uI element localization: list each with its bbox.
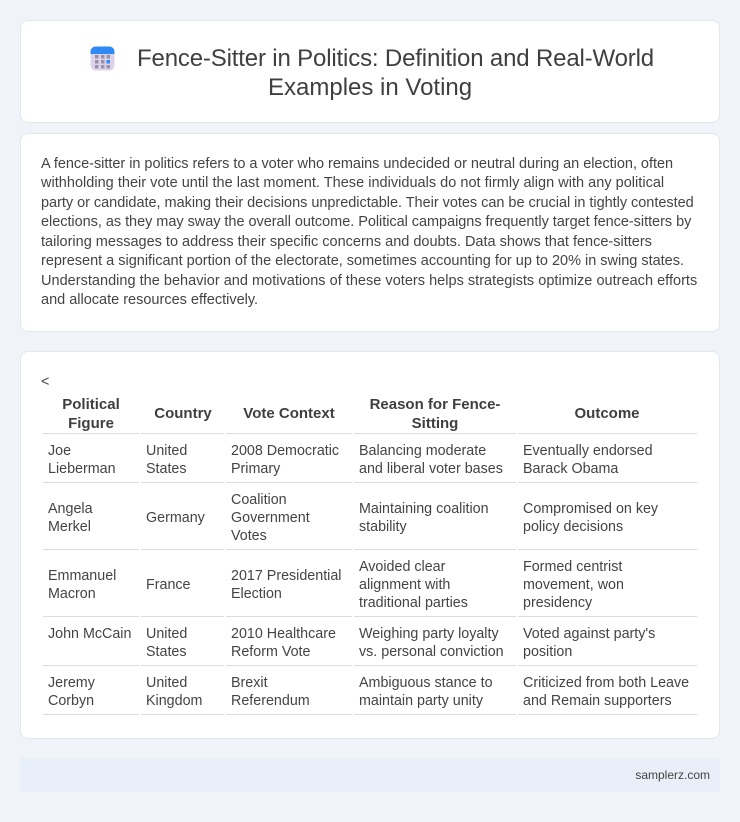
row: Joe Lieberman: Barack Obama	[523, 461, 618, 477]
row: Emmanuel Macron	[48, 559, 624, 611]
row: John McCain: Reform Vote	[231, 644, 310, 660]
table header row: Sitting	[412, 415, 458, 432]
row: Jeremy Corbyn: Kingdom	[146, 693, 202, 709]
text block: description: tailoring messages to address their specific concerns and doubts. Data shows that fence-sitters	[41, 234, 652, 250]
text block: description: Understanding the behavior and motivations of these voters helps strategists optimize outreach efforts	[41, 273, 697, 289]
text block: description: party or candidate, making their decisions unpredictable. Their votes can be crucial in tightly contested	[41, 195, 694, 211]
row: Emmanuel Macron: presidency	[523, 595, 592, 611]
row: Angela Merkel: stability	[359, 519, 407, 535]
stray character: <	[41, 374, 49, 390]
text block: description: withholding their vote until the last moment. These individuals do not firmly align with any political	[41, 175, 664, 191]
text block: description: represent a significant portion of the electorate, sometimes accounting for up to 20% in swing states.	[41, 253, 684, 269]
row: Joe Lieberman: Lieberman	[48, 461, 116, 477]
row: Jeremy Corbyn: Criticized from both Leave	[523, 675, 689, 691]
text block: description: A fence-sitter in politics refers to a voter who remains undecided or neutral during an election, often	[41, 156, 673, 172]
row: Jeremy Corbyn: Referendum	[231, 693, 310, 709]
row: Joe Lieberman: United	[146, 443, 187, 459]
row: Joe Lieberman: States	[146, 461, 187, 477]
row: Emmanuel Macron: 2017 Presidential	[231, 568, 341, 584]
row: Angela Merkel: Votes	[231, 528, 267, 544]
row: Angela Merkel: Merkel	[48, 519, 91, 535]
table header row: Political	[62, 396, 120, 413]
text block: description: and allocate resources effectively.	[41, 292, 258, 308]
row: Angela Merkel: Angela	[48, 501, 93, 517]
row: Emmanuel Macron: Formed centrist	[523, 559, 622, 575]
row: Emmanuel Macron: alignment with	[359, 577, 450, 593]
row: John McCain: Weighing party loyalty	[359, 626, 499, 642]
title	[137, 45, 654, 101]
row: Emmanuel Macron: movement, won	[523, 577, 624, 593]
title: Fence-Sitter in Politics: Definition and Real-World	[137, 45, 654, 72]
table header row: Figure	[68, 415, 114, 432]
row: Angela Merkel: Government	[231, 510, 310, 526]
panel: table card	[20, 351, 720, 739]
row: Joe Lieberman: Balancing moderate	[359, 443, 486, 459]
row: Emmanuel Macron: Emmanuel	[48, 568, 116, 584]
text block: description: elections, as they may sway the overall outcome. Political campaigns frequently target fence-sitters by	[41, 214, 691, 230]
row: Joe Lieberman: 2008 Democratic	[231, 443, 339, 459]
table header row: Reason for Fence-	[370, 396, 500, 413]
row: Angela Merkel	[48, 492, 658, 544]
row: Jeremy Corbyn: United	[146, 675, 187, 691]
row: Jeremy Corbyn: Brexit	[231, 675, 268, 691]
row: Joe Lieberman: and liberal voter bases	[359, 461, 503, 477]
row: Joe Lieberman: Joe	[48, 443, 71, 459]
title: Examples in Voting	[268, 74, 472, 101]
row: Joe Lieberman: Primary	[231, 461, 280, 477]
row: Jeremy Corbyn: Ambiguous stance to	[359, 675, 493, 691]
row: Emmanuel Macron: Election	[231, 586, 282, 602]
row: John McCain: Voted against party's	[523, 626, 655, 642]
row: Angela Merkel: Coalition	[231, 492, 287, 508]
row: John McCain: position	[523, 644, 572, 660]
row: John McCain: John McCain	[48, 626, 131, 642]
row: Jeremy Corbyn: Jeremy	[48, 675, 95, 691]
row: Emmanuel Macron: Macron	[48, 586, 96, 602]
row: Jeremy Corbyn: and Remain supporters	[523, 693, 672, 709]
row: Angela Merkel: Germany	[146, 510, 205, 526]
row: Joe Lieberman: Eventually endorsed	[523, 443, 653, 459]
row: John McCain: 2010 Healthcare	[231, 626, 336, 642]
row: John McCain: States	[146, 644, 187, 660]
footer bar	[20, 758, 720, 792]
row: Jeremy Corbyn: Corbyn	[48, 693, 94, 709]
panel: description card	[20, 133, 720, 332]
row: Jeremy Corbyn: maintain party unity	[359, 693, 483, 709]
row: Emmanuel Macron: traditional parties	[359, 595, 468, 611]
table header row	[62, 396, 640, 432]
row: Emmanuel Macron: Avoided clear	[359, 559, 445, 575]
text block: description	[41, 156, 697, 308]
table: fence-sitter examples	[43, 396, 697, 715]
row: Angela Merkel: policy decisions	[523, 519, 623, 535]
table header row: Vote Context	[243, 405, 335, 422]
table header row: Country	[154, 405, 212, 422]
row: John McCain: United	[146, 626, 187, 642]
row: Emmanuel Macron: France	[146, 577, 190, 593]
icon: calendar	[90, 46, 114, 70]
row: Angela Merkel: Maintaining coalition	[359, 501, 489, 517]
row: Joe Lieberman	[48, 443, 653, 477]
footer text: samplerz.com	[635, 768, 710, 782]
row: John McCain	[48, 626, 655, 660]
row: John McCain: vs. personal conviction	[359, 644, 504, 660]
row: Jeremy Corbyn	[48, 675, 689, 709]
panel: title card	[20, 20, 720, 123]
table header row: Outcome	[574, 405, 640, 422]
row: Angela Merkel: Compromised on key	[523, 501, 658, 517]
